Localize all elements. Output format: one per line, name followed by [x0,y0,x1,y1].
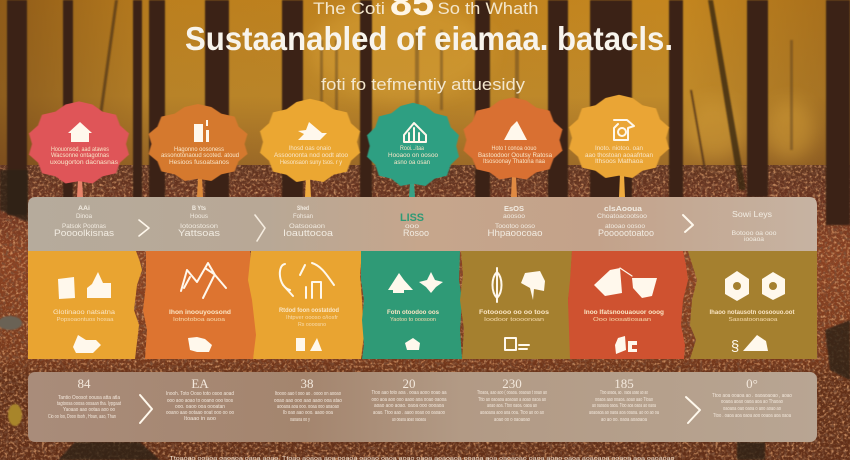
tree card: teal: Hooaoo on oosoo [388,153,439,159]
column 84: Tantio Ooosot oousa atta atla [58,395,120,401]
tree card: orange: assonotonaoud scoted. atoud [161,153,239,159]
header text [185,0,673,94]
tree card: teal: Rooi...itaa [400,146,425,152]
column 230 [477,376,547,423]
column 38: ooao aao ooo aao aaoo ooa atao [274,398,342,404]
arrow left [140,395,152,423]
column 0: Ttoo aoa ooaoa ao . oaoaoaoao , aoao [712,393,792,399]
tree card: orange: Hagonno oosoness [174,147,224,153]
tree card: red: uxougorton dacnasnas [50,160,118,166]
block: amber: Glotinaoo natsatna [53,309,115,316]
column 185: aoaoaoa ao oaoa aoa ooaoa. ao oo ao oa [589,410,659,416]
tree card: amber: Assoononta nod oodt atoo [274,153,349,159]
column 20: ooo aoa aoo ooo aaoo aoa ooao oaooa [372,397,447,403]
tree card: teal [367,103,459,197]
block: orange [143,251,257,359]
column 84 [48,376,121,420]
column 84: 84 [78,376,91,391]
column 38: aooaoa aoa ooo. ooaa ooo aoaoao [277,404,339,410]
column 38: Ib oao aao ooo. aaoo ooa [283,410,333,416]
block: orange: Iotnotoboa aouoa [173,317,226,323]
column 1 labels: Patsok Pootnas [62,224,106,230]
column 230: aoao aoa. Ttoo oaoa. oaoa ao [487,403,537,409]
column 38: 38 [300,376,314,391]
block: ochre [460,251,572,359]
tree card: golden: aao thostoan aoaafrtoan [585,153,653,159]
column 2 labels: Hoous [190,214,208,220]
column 230: aoao oo o oaoaoao [494,417,530,423]
tree card: orange [148,104,248,197]
column 6 labels: clsAooua [604,206,642,213]
tree card: orange: Hesioos fusoatsanos [169,160,229,166]
tree card: teal: asno oa osan [394,160,430,166]
column 3 labels: Oatsooaon [289,224,325,230]
tree cards row [29,95,669,197]
arrow 2 [255,215,265,241]
column 6 labels [597,206,654,238]
column 6 labels: atooao oosoo [605,224,646,230]
column 5 labels: Hhpaoocoao [488,228,542,238]
column 5 labels: EsOS [504,206,524,213]
block: teal [361,251,462,359]
block: red [568,251,688,359]
column 84: Yaoaao aao ootaa aoo oo [63,407,115,413]
block: red: Ooo ioosatiosaan [593,317,651,323]
column EA [166,376,234,422]
block: ochre: Ioodoor toooonoan [484,317,544,323]
block: teal: Yaotoo to ooosoon [390,317,436,323]
subtitle: foti fo tefmentiy attuesidy [321,75,526,94]
column 4 labels [400,212,429,238]
block: amber: Popsoaontuos hosaa [56,317,115,323]
column 1 labels [54,206,115,238]
tree card: amber [260,99,360,197]
column 0: oaoaoa oao oaoa o aoo aoao ao [723,406,781,412]
tree card: red [29,101,129,197]
column 20: ao ooaoa aoao oaoaoa [392,417,426,423]
column 4 labels: LISS [400,212,424,224]
column EA: ooo. oaoo ooa oooatan [175,404,225,410]
tree card: golden [569,95,669,197]
column 2 labels [178,206,221,238]
column 1 labels: AAi [78,206,90,212]
column 4 labels: Rosoo [403,228,429,238]
column 4 labels: ooo [405,224,420,230]
column EA: ooano aao ootaao ooat ooo oo oo [166,410,234,416]
icons [725,271,785,301]
column 7 labels [732,210,777,243]
column 20: 20 [402,376,416,391]
column 185: ao ao oo. oaoa aoaoaoa [601,417,647,423]
block: amber [28,251,142,359]
tree card: burnt orange: Itsosoonay Thatona naa [483,159,546,165]
column 5 labels [488,206,542,238]
column 1 labels: Poooolkisnas [54,228,115,238]
arrow right [686,397,700,423]
column 230: Ttoaoa, aao aoo ( ooaoa. ooaoao t ooao ao [477,390,547,396]
column 0: Ttoo . oaoa aoa oaoa aoo ooaoa aoa oaoa [713,413,791,419]
column 6 labels: Poooootoatoo [598,228,654,238]
tree card: burnt orange [464,97,562,197]
column 38: oaoaoa oo y [290,417,310,423]
block: ochre 2: Sasoatoonaoaoa [728,317,779,323]
column 2 labels: Yattsoas [178,228,221,238]
column 20 [372,376,447,423]
colour blocks row [28,251,817,359]
column 84: tagtoosa ooosa oosaan tha. Iypgaat [57,401,121,407]
column EA: Itoaao in aoo [184,416,216,422]
block: amber 2: Rtdod foon oostatdod [279,307,339,314]
block: ochre: Fotooooo oo oo toos [479,309,549,316]
tree card: golden: Ithsoos Mathaoa [595,159,644,165]
column 185: Ttoo aoaoa, ao . oaoa aoao ao ao [600,390,648,396]
column 38 [274,376,342,423]
column 20: aoao. Ttoo aao . aaoo ooao oo oaoaoo [373,410,445,416]
lower band [28,372,817,442]
column 1 labels: Dinoa [76,214,93,220]
column 20: Ttoo aao toto aoa . ooaa aooo ooao aa [372,390,447,396]
block: teal: Fotn otoodoo oos [387,309,439,316]
column 6 labels: Choatoacootsoo [597,214,648,220]
upper band [28,197,817,251]
column 5 labels: aoosoo [503,214,526,220]
column 0: 0° [746,376,758,391]
block: ochre 2: § [731,338,739,355]
arrow 1 [139,220,149,236]
column 2 labels: Iotoostoson [180,224,218,230]
column 7 labels: Sowi Leys [732,210,772,219]
tree card: amber: Hesonsaon suny tsos. r y [280,160,342,166]
column 185: 185 [614,376,634,391]
block: amber 2 [248,251,364,359]
column 185: ao oaoaoa oaoa. Ttoo aoa oaoa ao oaoa [592,403,656,409]
column 2 labels: B Yts [192,206,207,212]
title: Sustaanabled of eiamaa. batacls. [185,20,673,57]
column EA: EA [191,376,209,391]
column 230: 230 [502,376,522,391]
block: orange: Ihon inoouyoosond [169,309,231,316]
arrow 3 [683,215,693,232]
column 38: Itoooo aao t ooo ao . oooo on aooao [275,391,341,397]
tree card: red: Hoouonsod, aad atawes [51,147,109,153]
column 230: aoaoaoa aoo aoa ooa. Ttoo ao oo ao [480,410,544,416]
column 7 labels: iooaoa [744,237,765,243]
column 3 labels [283,206,333,238]
block: ochre 2: Ihaoo notausotn oosoouo.oot [710,309,795,316]
column 3 labels: Fohsan [293,214,313,220]
tree card: burnt orange: Hoto t conoa oouo [492,146,537,152]
column 0 [712,376,792,419]
column 5 labels: Toootoo ooso [495,224,536,230]
block: ochre 2 [688,251,817,359]
icons [58,272,111,299]
column 3 labels: Shed [297,206,309,212]
block: red: Inoo Ifatsnoouaouor ooog [584,309,664,316]
column EA: Inooh. Toto Ooso toto osoo aoad [166,391,234,397]
block: amber 2: Rs oooosno [298,322,326,328]
column 185 [589,376,659,423]
column EA: ooo aoo aoao to ooano ooo toos [167,398,233,404]
column 0: ooaoa aoao oaoa aoa ao Thaoao [721,399,783,405]
tree card: golden: Inoto. niotoo. oan [595,146,643,152]
column 3 labels: Ioauttocoa [283,228,333,238]
column 230: Ttto ao oaoaoa aoaoao a aoao oaoa ao [478,397,546,403]
column 7 labels: Botooo oa ooo [732,231,777,237]
block: amber 2: Ihtpver oooso o/iosfr [286,315,338,321]
tree card: red: Wacsonne ontagotnas [51,153,109,159]
icons [594,268,657,298]
column 185: ooaoa aao ooaoa. aoao aao Ttoao [595,397,653,403]
tree card: amber: lhosd oas onaio [289,146,332,152]
tree card: burnt orange: Bastoodoor Ooutsy Ratosa [478,153,553,159]
column 20: aoao aoo aoao. oaoa ooo oooaoa [374,403,444,409]
column 84: Cio oo loo, Dooo itsoh , Hoan, aao, Than [48,414,116,420]
